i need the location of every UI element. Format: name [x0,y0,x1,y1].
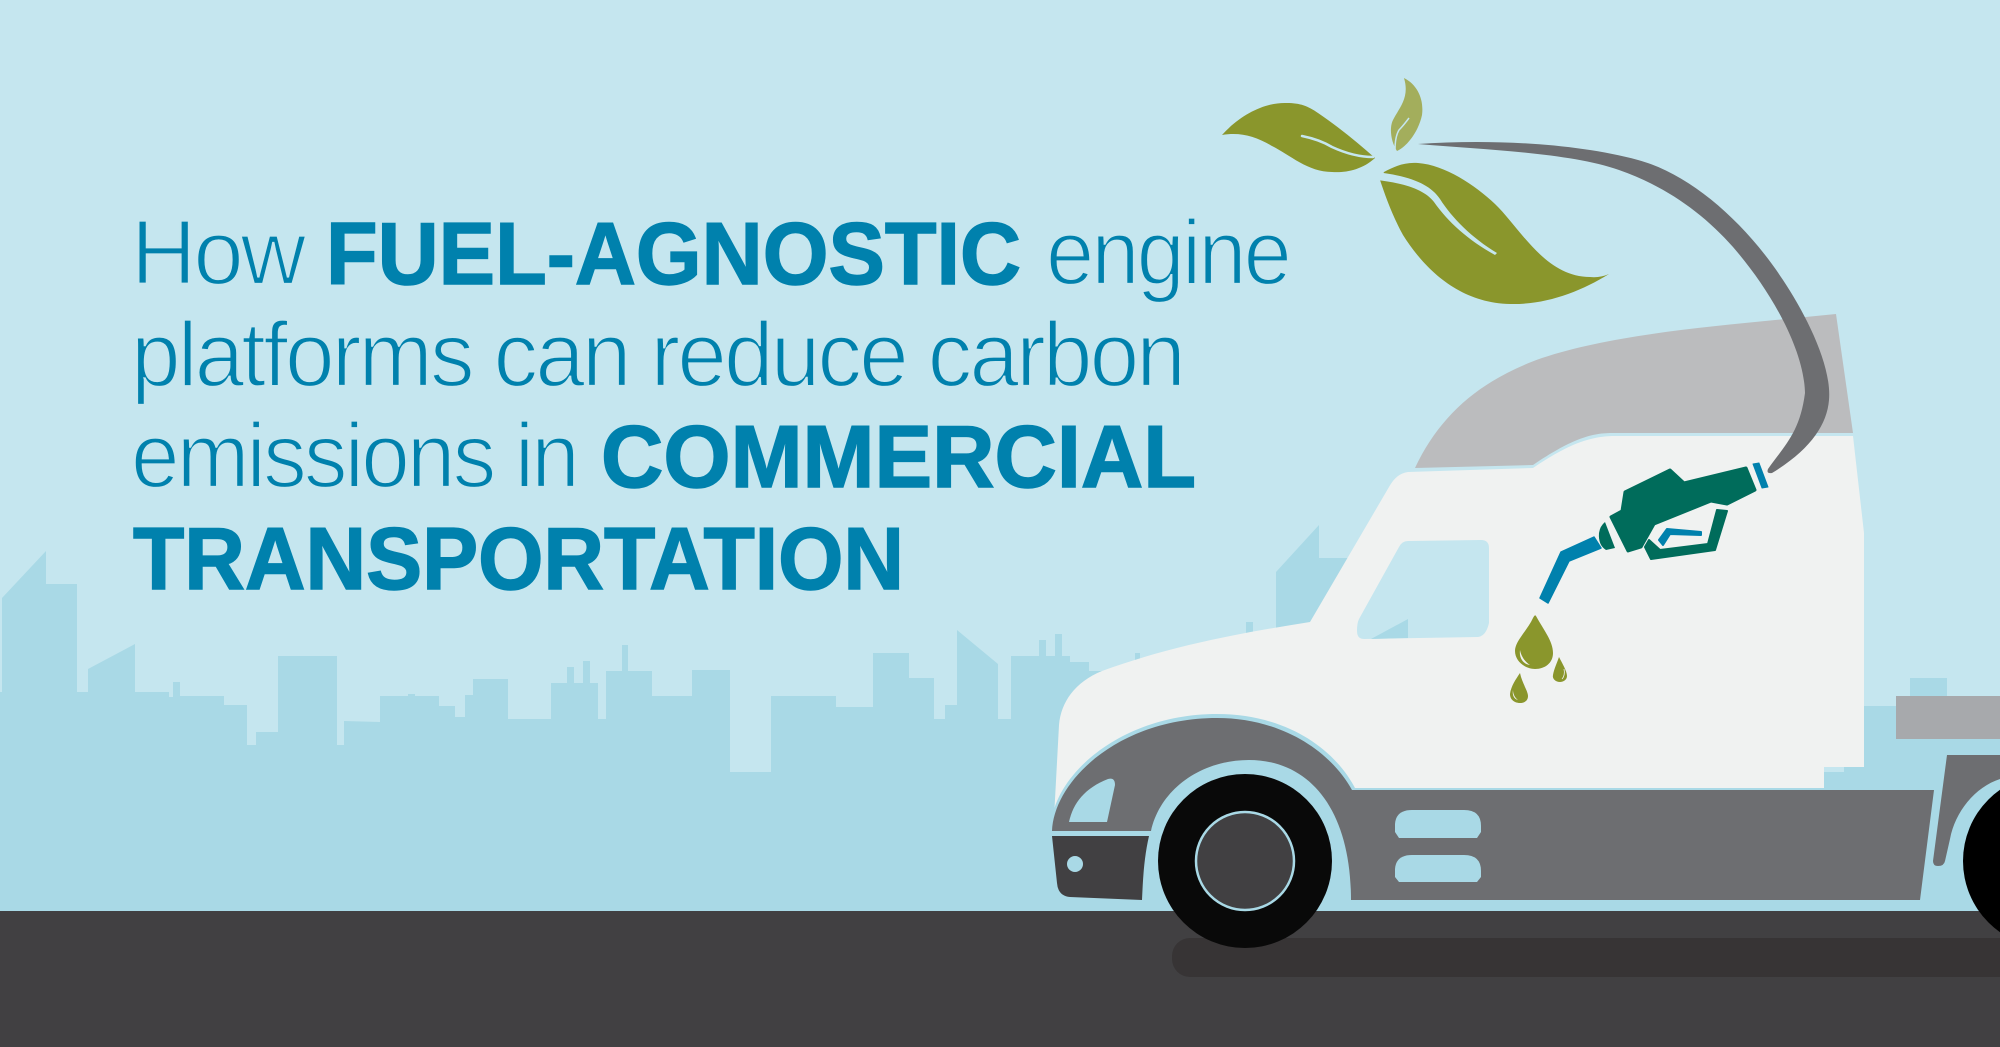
headline: TRANSPORTATION [133,509,904,608]
window reflection [1371,619,1408,639]
headline: engine [1046,202,1289,304]
trailer bar [1896,696,2000,739]
headline [131,202,1289,608]
fuel hose [1418,142,1829,473]
window [1357,540,1489,639]
vent bottom [1395,855,1481,882]
fender outline [1052,714,1356,832]
fender and side skirt [1052,718,1934,900]
trigger [1659,529,1701,545]
headline: How [131,202,307,304]
rear chassis [1933,755,2000,866]
truck [1052,314,2000,948]
trigger guard [1645,510,1727,559]
left leaf [1222,103,1375,172]
cab body [1054,436,1864,818]
leaves [1222,78,1609,304]
left drop [1510,673,1528,703]
headline: COMMERCIAL [601,407,1196,506]
road [0,911,2000,1047]
headline: platforms can reduce carbon [131,304,1183,406]
headlight [1069,779,1115,822]
headline: FUEL-AGNOSTIC [326,204,1021,303]
small leaf [1391,78,1422,151]
rear wheel [1963,774,2000,948]
vent top [1395,810,1481,838]
city skyline [0,525,2000,915]
roof fairing [1415,314,1853,468]
spout [1540,537,1601,603]
front wheel [1158,774,1332,948]
nozzle handle [1611,468,1755,551]
fog light [1067,856,1083,872]
hose collar [1753,463,1768,488]
fuel nozzle [1540,463,1768,603]
spout collar [1599,522,1615,550]
road shadow [1172,938,2000,977]
bumper [1052,836,1149,900]
large drop [1515,615,1553,669]
headline: emissions in [131,405,577,507]
fuel drops [1510,615,1567,703]
drop highlights [1513,650,1564,700]
right drop [1553,657,1567,682]
big leaf [1376,163,1609,304]
